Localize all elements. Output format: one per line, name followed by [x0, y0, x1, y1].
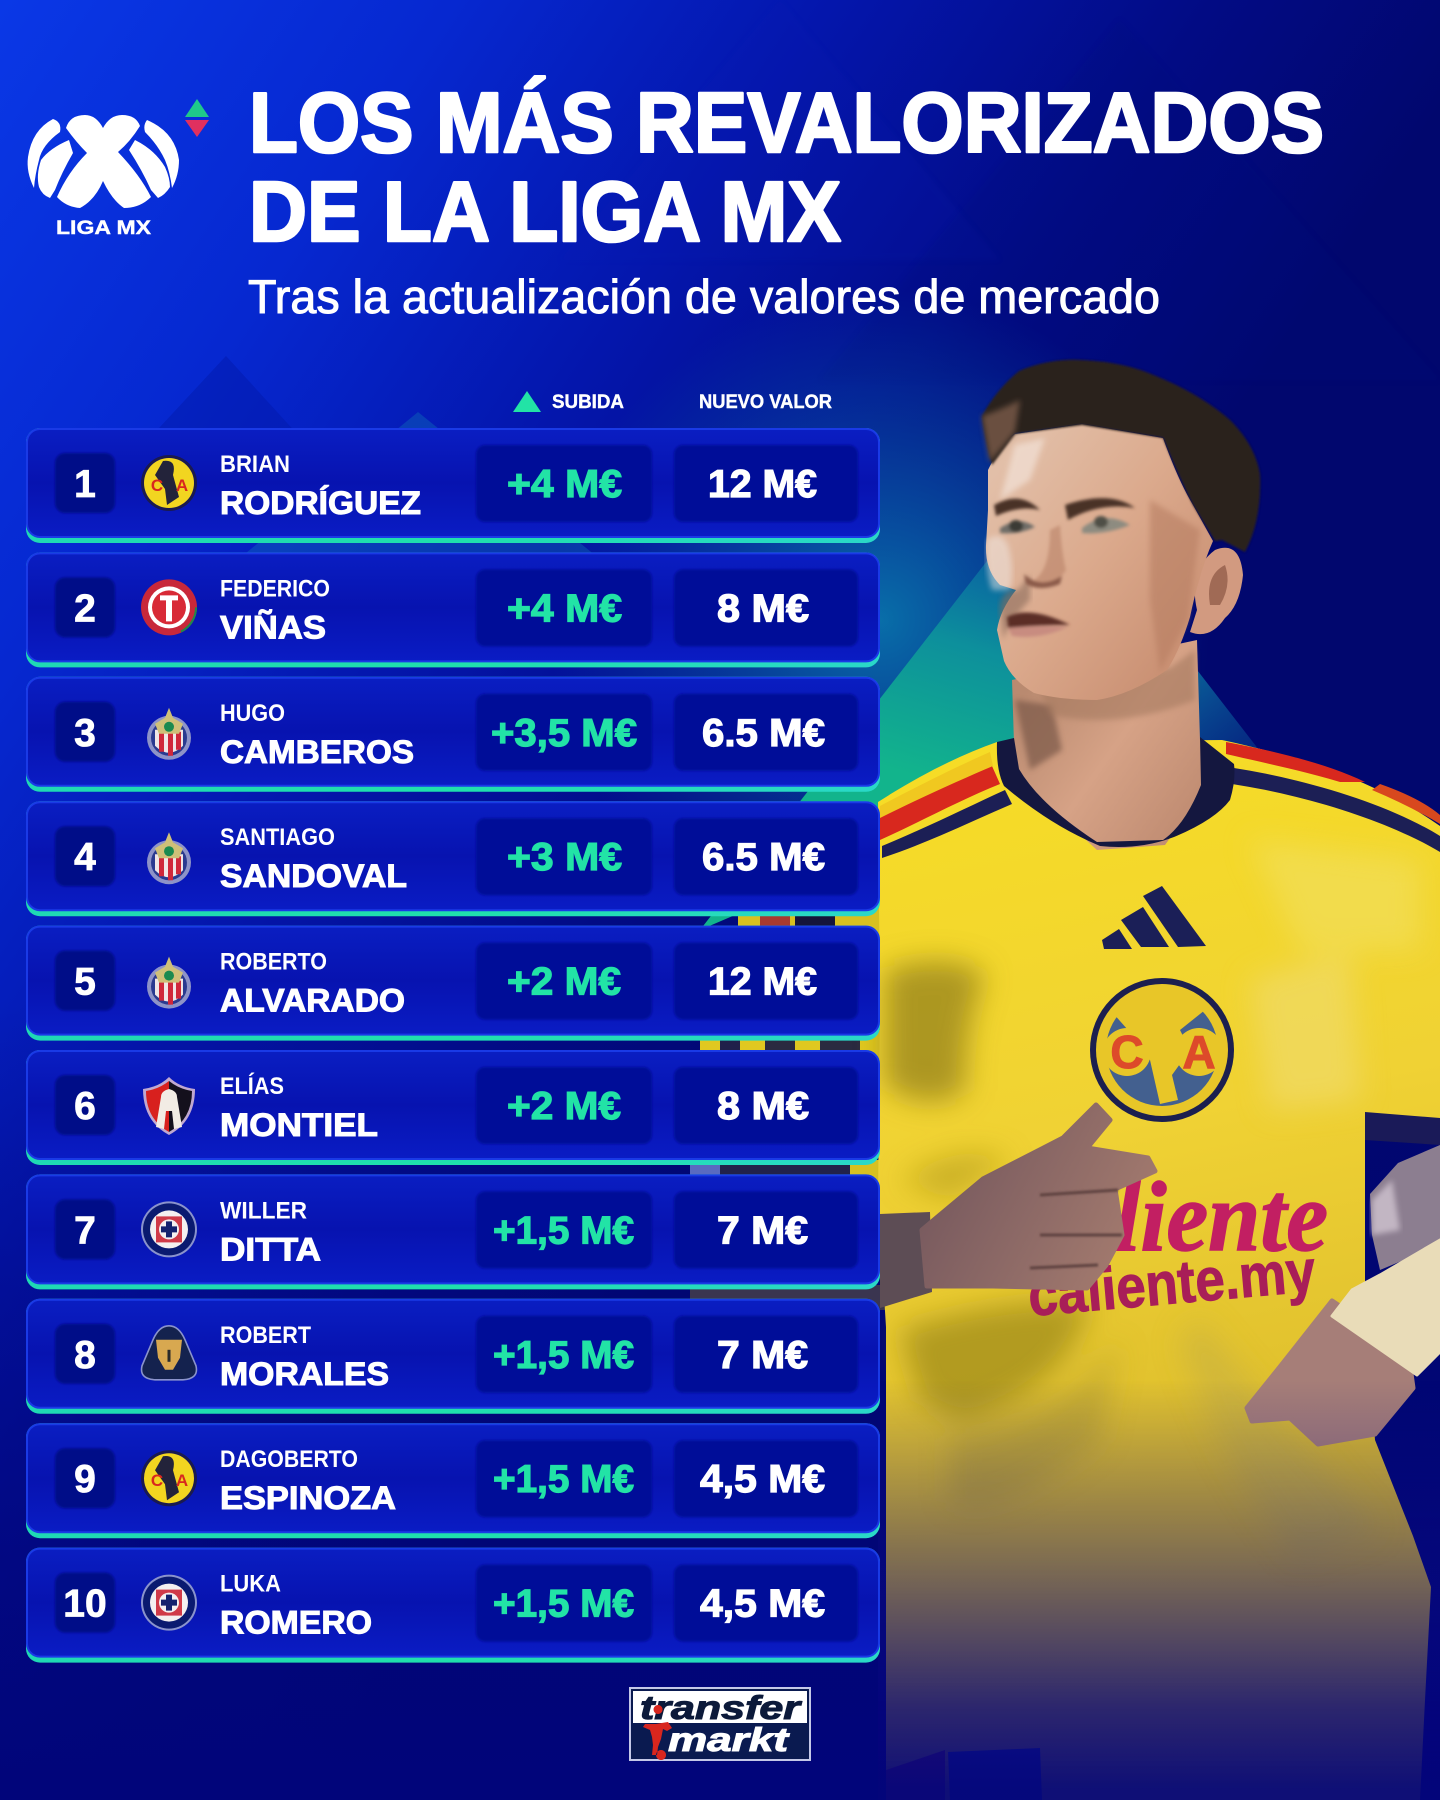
value box	[674, 818, 858, 895]
club badge: Chivas	[147, 832, 191, 884]
sponsor text: caliente.my	[1025, 1237, 1319, 1329]
value box: 12 M€	[708, 961, 817, 1004]
sponsor text: Caliente	[1005, 1161, 1328, 1272]
club badge: América	[141, 1450, 197, 1506]
rise box	[476, 1191, 652, 1268]
eyes and brows	[994, 498, 1135, 533]
transfermarkt logo: transfer	[640, 1689, 803, 1726]
row 7	[26, 1174, 880, 1289]
bottom fade over player	[878, 1380, 1440, 1800]
shorts	[886, 1748, 1042, 1800]
club badge: Atlas	[143, 1077, 195, 1135]
value box: 8 M€	[717, 1085, 809, 1128]
rise box: +3,5 M€	[491, 712, 637, 755]
row 2	[26, 552, 880, 667]
title	[249, 76, 1324, 260]
last name: ROMERO	[220, 1605, 372, 1641]
right arm with wrist wrap and hand	[1247, 1145, 1440, 1444]
row 4: 4	[74, 836, 96, 879]
player photo	[690, 360, 1440, 1800]
value box	[674, 1191, 858, 1268]
column header: subida: SUBIDA	[552, 392, 624, 413]
nose and mouth	[1007, 525, 1070, 637]
title: LOS MÁS REVALORIZADOS	[249, 76, 1324, 171]
neck	[1012, 640, 1204, 850]
club badge: América: C	[151, 476, 163, 495]
transfermarkt logo	[630, 1688, 810, 1760]
last name: RODRÍGUEZ	[220, 485, 421, 521]
rise box	[476, 1067, 652, 1144]
rise box: +1,5 M€	[493, 1209, 634, 1252]
value box: 7 M€	[717, 1334, 808, 1377]
row 3: 3	[74, 712, 96, 755]
row 9	[26, 1423, 880, 1538]
club badge: Chivas	[147, 957, 191, 1009]
club badge: América: C	[151, 1471, 163, 1490]
value box	[674, 1316, 858, 1393]
rise box: +3 M€	[507, 836, 622, 879]
rise box: +4 M€	[507, 587, 622, 630]
row 6	[26, 1050, 880, 1165]
first name: WILLER	[220, 1197, 307, 1224]
left arm and hand	[880, 1105, 1155, 1308]
row 3	[26, 677, 880, 792]
rise box: +1,5 M€	[493, 1334, 634, 1377]
first name: BRIAN	[220, 451, 290, 478]
club crest on shirt	[1090, 978, 1234, 1122]
rise box	[476, 943, 652, 1020]
row 8: 8	[74, 1334, 96, 1377]
club badge: Cruz Azul	[141, 1575, 197, 1631]
column header: nuevo valor: NUEVO VALOR	[699, 392, 832, 413]
row 7: 7	[74, 1209, 96, 1252]
value box: 6.5 M€	[702, 836, 825, 879]
row 5	[26, 926, 880, 1041]
rise box	[476, 445, 652, 522]
adidas logo	[1102, 886, 1206, 949]
left shoulder stripes	[878, 752, 1012, 858]
first name: FEDERICO	[220, 575, 330, 602]
first name: LUKA	[220, 1571, 281, 1598]
ear	[1190, 548, 1243, 634]
first name: SANTIAGO	[220, 824, 335, 851]
last name: CAMBEROS	[220, 734, 414, 770]
logo mark	[28, 115, 179, 208]
arm behind the rows	[690, 905, 890, 1310]
sponsor text	[1005, 1161, 1328, 1329]
rise box: +1,5 M€	[493, 1458, 634, 1501]
value box: 4,5 M€	[700, 1583, 825, 1626]
row 6: 6	[74, 1085, 96, 1128]
row 4	[26, 801, 880, 916]
value box	[674, 1440, 858, 1517]
rise box	[476, 818, 652, 895]
red player figure	[643, 1705, 672, 1760]
club badge: Cruz Azul	[141, 1201, 197, 1257]
rise box	[476, 569, 652, 646]
club badge: Pumas	[142, 1326, 196, 1380]
club crest on shirt: A	[1182, 1026, 1216, 1078]
right shoulder stripes	[1226, 742, 1440, 852]
value box: 12 M€	[708, 463, 817, 506]
club badge: Chivas	[147, 708, 191, 760]
first name: HUGO	[220, 700, 285, 727]
last name: MORALES	[220, 1356, 389, 1392]
logo wordmark: LIGA MX	[56, 218, 151, 239]
last name: VIÑAS	[220, 609, 326, 645]
first name: DAGOBERTO	[220, 1446, 358, 1473]
first name: ELÍAS	[220, 1072, 284, 1100]
club badge: América	[141, 455, 197, 511]
value box	[674, 445, 858, 522]
last name: MONTIEL	[220, 1107, 378, 1143]
row 10: 10	[63, 1583, 107, 1626]
rise box	[476, 1565, 652, 1642]
last name: DITTA	[220, 1231, 321, 1267]
row 5: 5	[74, 961, 96, 1004]
last name: ALVARADO	[220, 983, 405, 1019]
row 2: 2	[74, 587, 96, 630]
value box	[674, 1565, 858, 1642]
value box: 4,5 M€	[700, 1458, 825, 1501]
last name: ESPINOZA	[220, 1480, 396, 1516]
row 8	[26, 1299, 880, 1414]
value box	[674, 569, 858, 646]
subtitle: Tras la actualización de valores de mercado	[248, 270, 1160, 323]
last name: SANDOVAL	[220, 858, 407, 894]
row 1	[26, 428, 880, 543]
first name: ROBERT	[220, 1322, 311, 1349]
value box	[674, 943, 858, 1020]
rise box: +1,5 M€	[493, 1583, 634, 1626]
transfermarkt logo: markt	[668, 1721, 791, 1758]
logo green triangle	[185, 99, 209, 117]
yellow shirt	[878, 740, 1440, 1800]
rise box	[476, 1440, 652, 1517]
title: DE LA LIGA MX	[249, 165, 841, 260]
club crest on shirt: C	[1110, 1026, 1144, 1078]
hair	[982, 360, 1260, 552]
value box: 6.5 M€	[702, 712, 825, 755]
rise box	[476, 1316, 652, 1393]
value box	[674, 1067, 858, 1144]
club badge: América: A	[176, 1471, 188, 1490]
sleeve cuff	[1365, 1112, 1440, 1145]
club badge: Toluca	[141, 579, 197, 635]
logo red triangle	[185, 120, 209, 137]
value box: 7 M€	[717, 1209, 808, 1252]
face	[986, 424, 1213, 700]
rise box: +4 M€	[507, 463, 622, 506]
rise box: +2 M€	[507, 961, 621, 1004]
row 10	[26, 1548, 880, 1663]
first name: ROBERTO	[220, 949, 327, 976]
rise box: +2 M€	[507, 1085, 621, 1128]
club badge: América: A	[176, 476, 188, 495]
value box	[674, 694, 858, 771]
row 9: 9	[74, 1458, 96, 1501]
value box: 8 M€	[717, 587, 809, 630]
collar	[997, 737, 1234, 847]
Liga MX logo	[28, 99, 209, 239]
shirt folds	[885, 840, 1420, 1560]
column header: subida	[513, 391, 624, 413]
rise box	[476, 694, 652, 771]
row 1: 1	[74, 463, 96, 506]
